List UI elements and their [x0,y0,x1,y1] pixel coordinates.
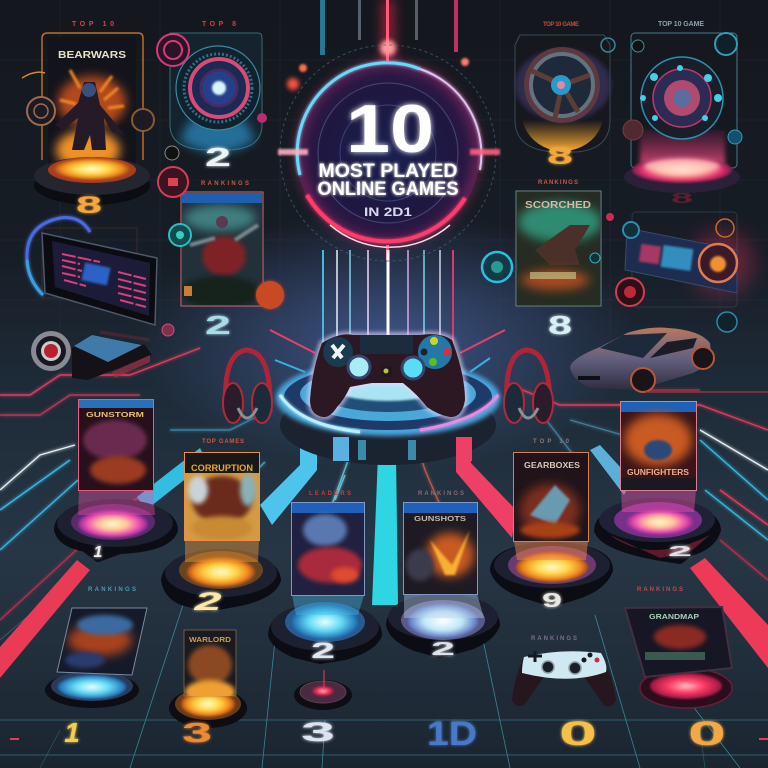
bottom item: white controller: RANKINGS [531,636,577,642]
headphones: right [504,350,553,423]
mid left poster [180,181,263,340]
mid left panel: monitor [27,218,157,340]
rank number: 1 [64,717,80,748]
rank number: 3 [182,717,212,748]
title line 2: ONLINE GAMES [318,179,458,200]
poster title: GRANDMAP [649,614,699,621]
central emblem [278,45,500,261]
poster title: CORRUPTION [191,463,253,473]
icon: teal dial [482,213,614,282]
bottom item: white controller [512,636,616,707]
rank number: 2 [193,588,222,616]
top panel 3: wheel [515,22,615,170]
rank number: 1 [94,544,103,561]
top panel 2: blue target [157,21,267,172]
floor band: left red [0,560,90,678]
floor grid [0,580,768,768]
edge marks [10,738,768,740]
rank number: 8 [671,190,693,207]
poster title: BEARWARS [58,50,126,61]
label: TOP 8 [202,21,236,28]
pedestal 5 with poster: TOP 10 [533,439,570,445]
poster title: GUNSHOTS [414,516,466,523]
pedestal [34,157,150,205]
bottom item 6: RANKINGS [637,587,683,593]
floor band: blue right [590,445,632,495]
icon: pink badge [157,34,189,66]
bottom item 1 [45,587,147,748]
center controller [310,334,465,417]
pedestal 6 with poster [598,402,717,560]
rank number: 8 [76,192,102,219]
poster title: GEARBOXES [524,461,581,470]
floor band: center cyan [372,455,398,605]
rank number: 8 [547,143,573,170]
base [57,499,174,558]
poster title: WARLORD [189,637,231,644]
rank number: 10: 1D [427,715,477,753]
rank number: 2 [668,543,692,560]
circuit lines: right [415,385,768,580]
rank number: 2 [431,639,455,659]
title number: 10 [346,91,434,167]
label: RANKINGS [201,181,249,187]
red light beam [287,0,469,260]
rank number: 0 yellow: 0 [559,715,597,753]
rank number: 0 orange: 0 [688,715,726,753]
rank number: 2 [205,142,231,172]
pedestal [624,157,740,193]
pedestal 3 with poster: LEADERS [309,491,351,497]
mid right panel: curved screen [616,212,754,332]
icons beside mid left poster [158,167,284,336]
bottom item 1: RANKINGS [88,587,136,593]
console device [31,331,152,380]
circuit lines: left [0,348,350,620]
car [570,328,768,392]
poster title: GUNFIGHTERS [627,468,690,477]
floor band: cyan mid [260,436,317,525]
light lines below emblem [270,250,505,372]
pedestal 2 with poster [165,439,277,616]
rank number: 3 [301,717,335,747]
label: TOP 10 GAME [543,22,579,28]
label: RANKINGS [538,180,578,186]
center platform [276,360,500,465]
pedestal 5 with poster [494,439,610,612]
rank number: 2 [205,310,231,340]
pedestal 1 with poster [57,400,174,561]
poster title: SCORCHED [525,200,591,211]
poster banner [182,193,262,203]
poster title: GUNSTORM [86,412,144,419]
rank number: 8 [548,310,572,340]
title year: IN 2D1 [364,205,412,219]
pedestal 4 with poster: RANKINGS [418,491,464,497]
rank number: 9 [542,590,562,612]
label: TOP 10 GAME [658,21,704,28]
bottom item 3 [294,670,352,747]
headphones: left [223,350,272,423]
pedestal 3 with poster [271,491,379,663]
label: TOP 10 [72,21,114,28]
top panel 1: fire poster [22,21,154,219]
floor band: pink center right [456,437,516,538]
bottom item 2 [169,630,247,748]
rank number: 2 [311,638,335,663]
mid right poster [516,180,602,340]
pedestal 4 with poster [388,491,498,659]
top panel 4: pink portal [623,21,742,207]
title line 1: MOST PLAYED [318,161,458,182]
bottom item 6 [625,587,732,708]
pedestal 2 with poster: TOP GAMES [202,439,244,445]
floor band: right red [690,558,768,668]
floor band: cyan left [137,448,207,510]
